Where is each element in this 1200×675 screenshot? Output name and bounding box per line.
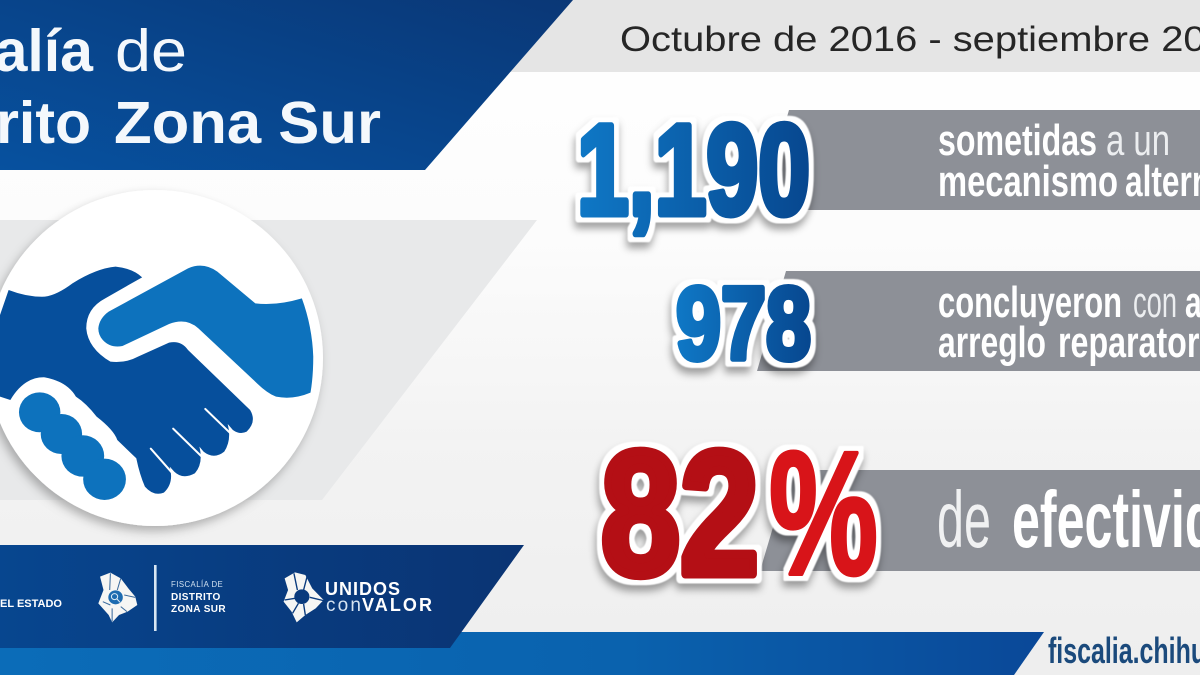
number: 978: 978 (676, 266, 811, 381)
number: 82%: 82 (601, 416, 759, 612)
footer strip (0, 632, 1044, 675)
bar: 82% (760, 470, 1200, 571)
bar label: concluyeron (938, 278, 1122, 327)
logo: district name: FISCALÍA DE (171, 580, 223, 589)
logo: unidos con valor text: con (326, 595, 361, 616)
icon: state map with magnifier (98, 573, 137, 622)
footer logo panel (0, 545, 524, 648)
date range text: Octubre de 2016 - septiembre 2017 (620, 20, 1200, 59)
finger gaps (151, 409, 229, 473)
icon: handshake in circle (0, 190, 323, 526)
bar label: mecanismo (938, 157, 1118, 206)
title heading: de (115, 18, 187, 84)
logo: unidos con valor text: UNIDOS (325, 579, 400, 599)
cuff of the hand (19, 392, 126, 500)
bar label: arreglo (938, 318, 1046, 367)
icon: unidos con valor mark (284, 572, 324, 622)
gray slanted backdrop behind icon (0, 220, 537, 500)
bar label: a un (1106, 116, 1170, 165)
date band (480, 0, 1200, 72)
title heading: Zona Sur (114, 90, 381, 156)
number: 1,190: 1,190 (577, 99, 810, 242)
bar label: sometidas (938, 116, 1097, 165)
bar label: de (937, 475, 991, 564)
bar: 1,190 (760, 110, 1200, 210)
bar: 978 (757, 271, 1200, 371)
logo: unidos con valor text: VALOR (362, 595, 432, 615)
logo: district name: DISTRITO (171, 592, 221, 603)
title panel (0, 0, 573, 170)
logo: district name: ZONA SUR (171, 604, 226, 615)
dark blue hand (0, 267, 253, 494)
divider (154, 565, 157, 631)
light blue hand (98, 266, 313, 398)
percent sign: % (769, 416, 878, 612)
